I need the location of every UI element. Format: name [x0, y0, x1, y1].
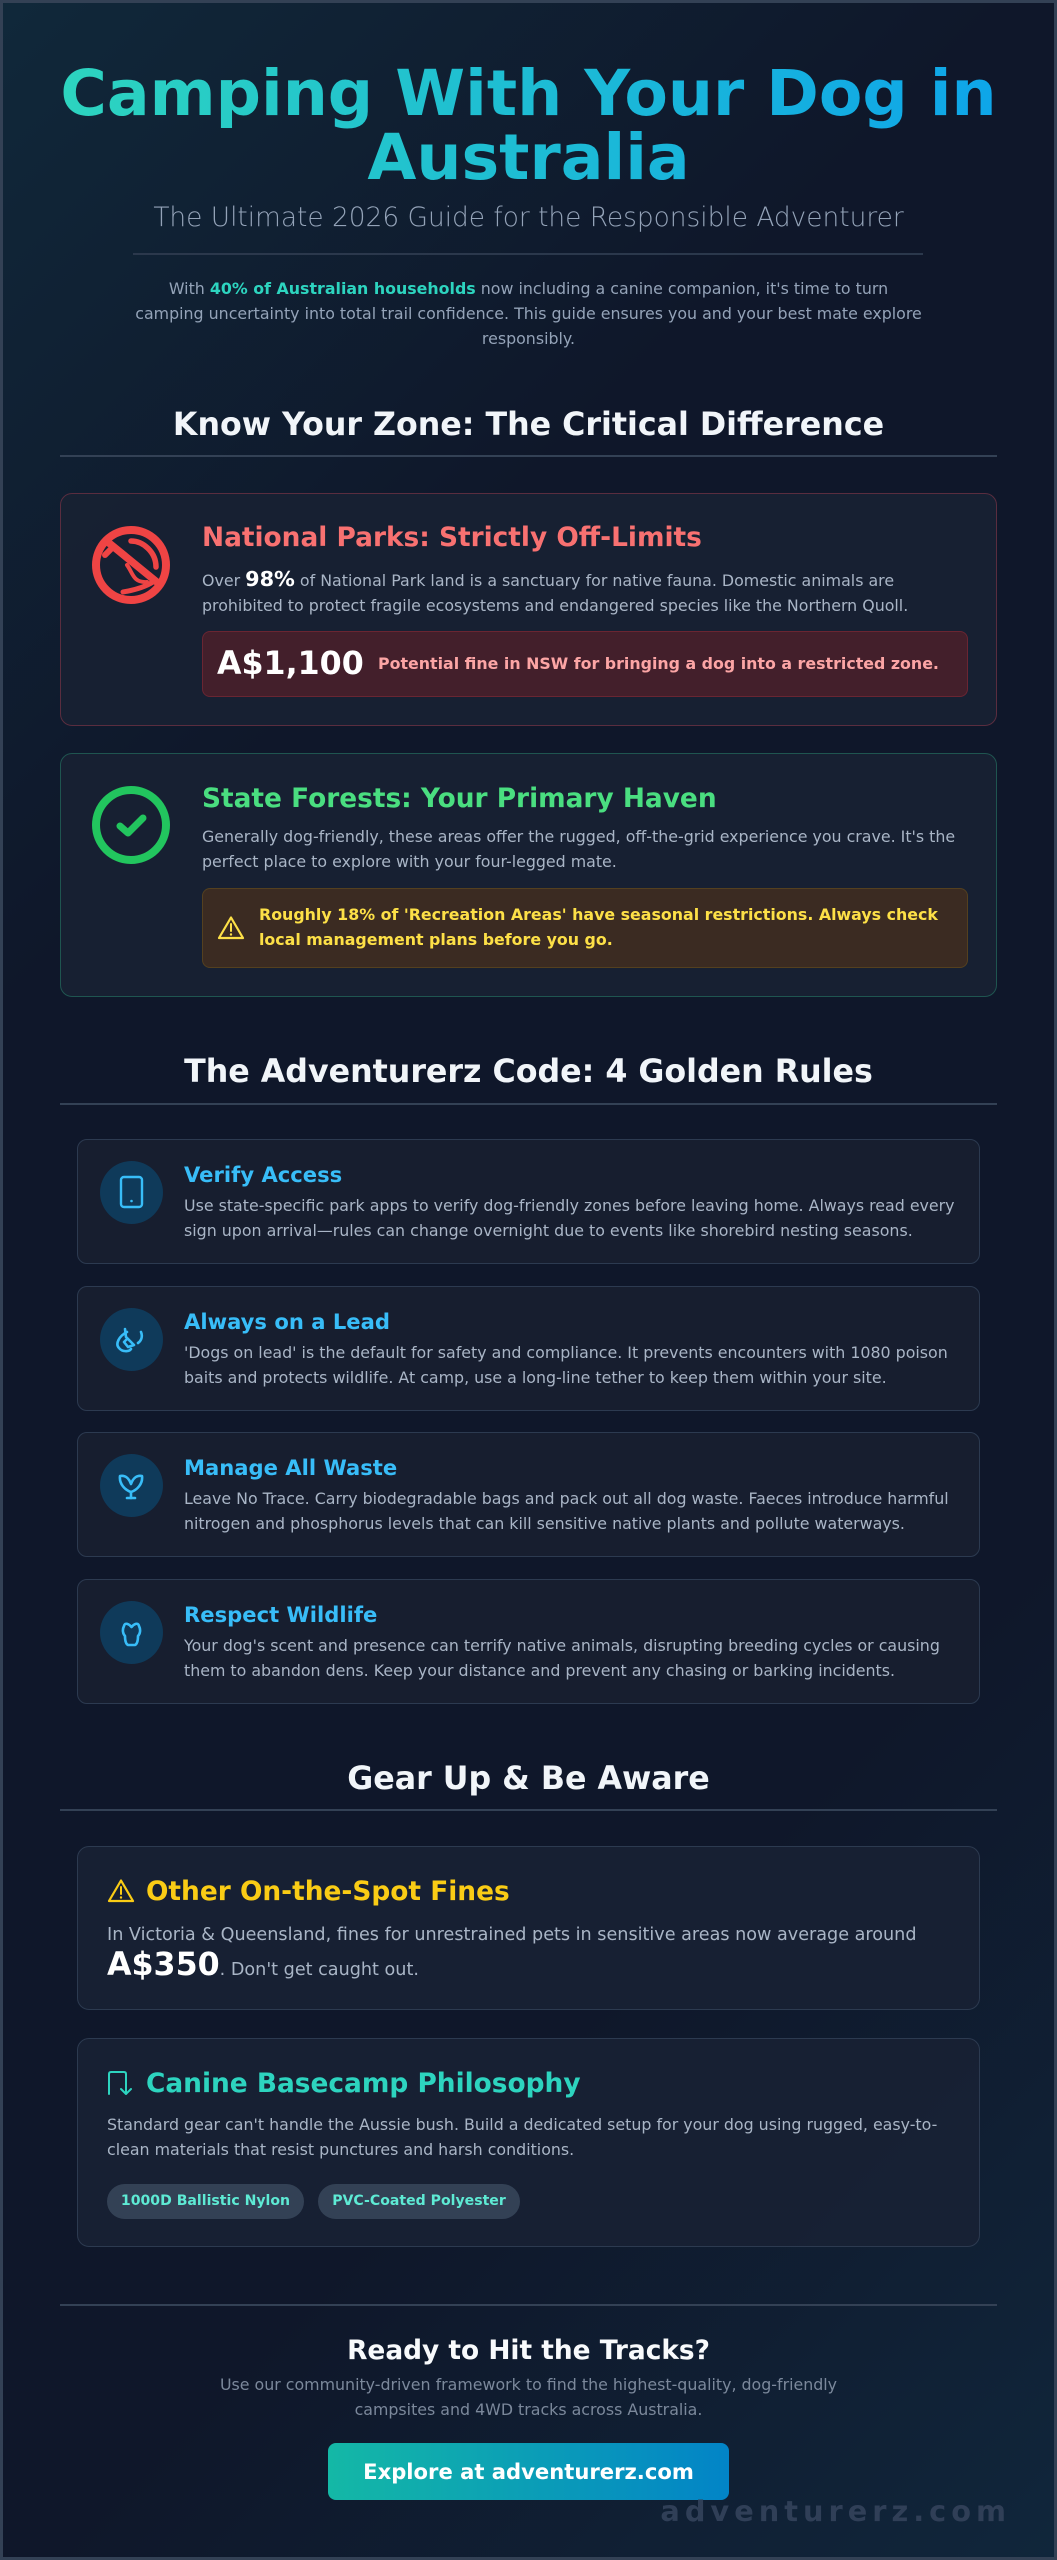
body text: prohibited to protect fragile ecosystems and endangered species like the Northern Quoll. [202, 596, 908, 615]
rule title: Respect Wildlife [184, 1602, 377, 1627]
body text: Over 98% of National Park land is a sanctuary for native fauna. Domestic animals are [202, 567, 894, 591]
fine callout [202, 631, 968, 697]
intro text [135, 279, 922, 348]
heading: basecamp: Canine Basecamp Philosophy [146, 2068, 581, 2099]
rule card: manage all waste [77, 1432, 980, 1557]
panel: state forests [60, 753, 997, 997]
fines text [107, 1925, 916, 1983]
rule text: them to abandon dens. Keep your distance and prevent any chasing or barking incidents. [184, 1661, 895, 1680]
button: Explore at adventurerz.com [363, 2459, 694, 2484]
icon: check circle [92, 786, 170, 864]
rule text: Leave No Trace. Carry biodegradable bags and pack out all dog waste. Faeces introduce harmful [184, 1489, 949, 1508]
body text: perfect place to explore with your four-legged mate. [202, 852, 617, 871]
title: Camping With Your Dog in [60, 56, 997, 130]
intro text: camping uncertainty into total trail confidence. This guide ensures you and your best mate explore [135, 304, 922, 323]
icon: no dogs [92, 526, 170, 604]
footer heading: Ready to Hit the Tracks? [347, 2335, 710, 2366]
rule text: Your dog's scent and presence can terrify native animals, disrupting breeding cycles or causing [184, 1636, 940, 1655]
pill: polyester [318, 2184, 520, 2219]
rule card: verify access [77, 1139, 980, 1264]
basecamp text: clean materials that resist punctures and harsh conditions. [107, 2140, 574, 2159]
heading: fines: Other On-the-Spot Fines [146, 1876, 510, 1907]
pill: nylon [107, 2184, 304, 2219]
footer text: Use our community-driven framework to find the highest-quality, dog-friendly [220, 2375, 837, 2394]
rule text [184, 1636, 940, 1680]
warning text: Roughly 18% of 'Recreation Areas' have seasonal restrictions. Always check [259, 905, 938, 924]
rule text [184, 1196, 955, 1240]
icon: lead [100, 1308, 163, 1371]
heading: adventurerz code: The Adventurerz Code: 4 Golden Rules [184, 1054, 873, 1090]
icon: warning triangle [108, 1879, 134, 1902]
fines text: In Victoria & Queensland, fines for unrestrained pets in sensitive areas now average around [107, 1925, 916, 1945]
panel: canine basecamp [77, 2038, 980, 2247]
icon: warning triangle [218, 916, 244, 940]
fines text: A$350. Don't get caught out. [107, 1947, 419, 1983]
rule text [184, 1489, 949, 1533]
rule text: baits and protects wildlife. At camp, use a long-line tether to keep them within your site. [184, 1368, 887, 1387]
intro text: responsibly. [482, 329, 575, 348]
basecamp text [107, 2115, 937, 2159]
rule text: 'Dogs on lead' is the default for safety and compliance. It prevents encounters with 1080 poison [184, 1343, 948, 1362]
fine description: Potential fine in NSW for bringing a dog into a restricted zone. [378, 654, 939, 673]
rule text: Use state-specific park apps to verify dog-friendly zones before leaving home. Always read every [184, 1196, 955, 1215]
heading: gear up: Gear Up & Be Aware [347, 1761, 710, 1797]
warning text: local management plans before you go. [259, 930, 613, 949]
heading: national parks: National Parks: Strictly Off-Limits [202, 522, 702, 553]
panel: national parks [60, 493, 997, 726]
pill: nylon: 1000D Ballistic Nylon [121, 2193, 290, 2209]
icon: paw [100, 1601, 163, 1664]
intro text: With 40% of Australian households now including a canine companion, it's time to turn [169, 279, 888, 298]
heading: know your zone: Know Your Zone: The Critical Difference [173, 407, 884, 443]
fine amount: A$1,100 [217, 646, 364, 682]
footer call to action [220, 2335, 837, 2500]
warning callout [202, 888, 968, 968]
rule card: always on a lead [77, 1286, 980, 1411]
icon: basecamp [108, 2071, 132, 2095]
body text: Generally dog-friendly, these areas offer the rugged, off-the-grid experience you crave. It's the [202, 827, 955, 846]
rule text [184, 1343, 948, 1387]
footer text [220, 2375, 837, 2419]
warning text [259, 905, 938, 949]
rule card: respect wildlife [77, 1579, 980, 1704]
title [60, 61, 997, 189]
header [60, 56, 997, 348]
rule text: sign upon arrival—rules can change overnight due to events like shorebird nesting seasons. [184, 1221, 913, 1240]
icon: phone [100, 1161, 163, 1224]
pill: polyester: PVC-Coated Polyester [332, 2193, 506, 2209]
icon: sprout [100, 1454, 163, 1517]
rule title: Always on a Lead [184, 1309, 390, 1334]
rule title: Manage All Waste [184, 1455, 397, 1480]
footer text: campsites and 4WD tracks across Australia. [355, 2400, 702, 2419]
panel: other fines [77, 1846, 980, 2010]
watermark: adventurerz.com [660, 2494, 1011, 2528]
body text [202, 567, 908, 615]
basecamp text: Standard gear can't handle the Aussie bush. Build a dedicated setup for your dog using rugged, easy-to- [107, 2115, 937, 2134]
subtitle: The Ultimate 2026 Guide for the Responsible Adventurer [153, 202, 904, 233]
body text [202, 827, 955, 871]
rule title: Verify Access [184, 1162, 342, 1187]
button [328, 2443, 729, 2500]
title: Australia [367, 120, 690, 194]
heading: state forests: State Forests: Your Primary Haven [202, 783, 717, 814]
rule text: nitrogen and phosphorus levels that can kill sensitive native plants and pollute waterways. [184, 1514, 905, 1533]
